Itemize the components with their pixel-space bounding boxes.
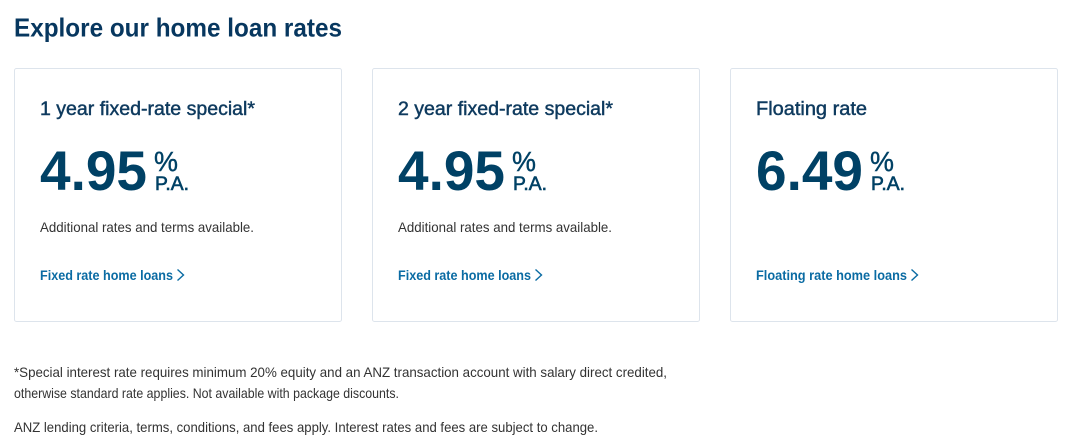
per annum label: P.A. [871,174,905,195]
footnote: lending criteria: ANZ lending criteria, terms, conditions, and fees apply. Interest rates and fees are subject to change. [14,419,598,435]
panel: floating rate [730,68,1058,322]
percent sign: % [512,146,536,177]
icon: chevron [912,270,918,280]
card heading: 1 year fixed-rate special* [40,99,256,120]
panel: 1 year fixed-rate special [14,68,342,322]
rate value: 4.95 [398,139,505,202]
icon: chevron [178,270,184,280]
percent sign: % [154,146,178,177]
footnote: special rate conditions: *Special interest rate requires minimum 20% equity and an ANZ transaction account with salary direct credited, [14,364,667,380]
card heading: 2 year fixed-rate special* [398,99,614,120]
title: Explore our home loan rates [14,12,342,42]
additional rates note: Additional rates and terms available. [40,219,254,235]
link: fixed rate home loans: Fixed rate home loans [40,267,173,283]
percent sign: % [870,146,894,177]
per annum label: P.A. [513,174,547,195]
panel: 2 year fixed-rate special [372,68,700,322]
card heading: Floating rate [756,99,867,120]
per annum label: P.A. [155,174,189,195]
rate value: 4.95 [40,139,147,202]
icon: chevron [536,270,542,280]
footnote: special rate conditions: otherwise standard rate applies. Not available with package discounts. [14,385,399,401]
footnote: special rate conditions [14,364,667,401]
link: floating rate home loans: Floating rate home loans [756,267,907,283]
additional rates note: Additional rates and terms available. [398,219,612,235]
link: fixed rate home loans: Fixed rate home loans [398,267,531,283]
rate value: 6.49 [756,139,863,202]
